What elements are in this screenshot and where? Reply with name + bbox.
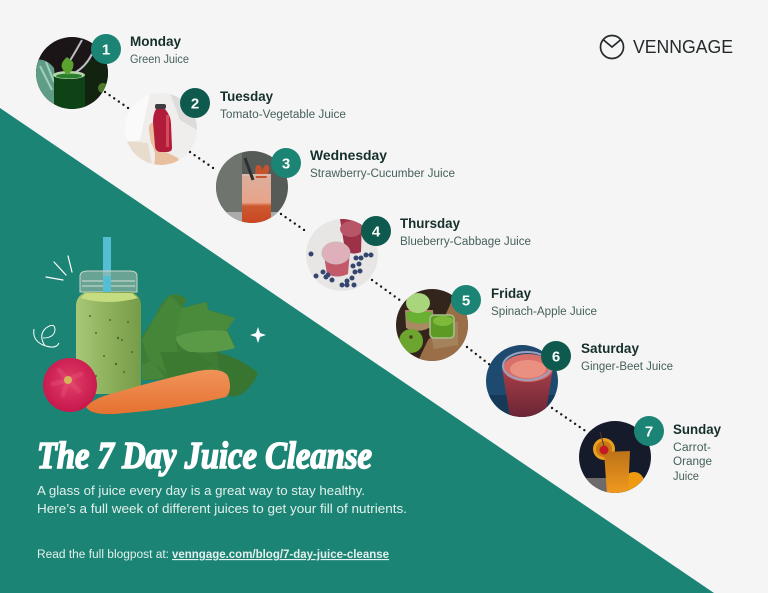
logo: Venngage — [600, 36, 733, 58]
label: Friday — [491, 285, 597, 318]
dotted connectors between days — [105, 92, 587, 432]
step: Saturday — [486, 340, 673, 418]
description: Here’s a full week of different juices to get your fill of nutrients. — [37, 501, 407, 516]
badge: 4 — [361, 216, 391, 246]
badge: 7 — [634, 416, 664, 446]
step: Sunday — [579, 416, 721, 494]
icon: sparkle — [250, 327, 266, 343]
label: Wednesday: Strawberry-Cucumber Juice — [310, 168, 455, 180]
label: Monday: Monday — [130, 33, 181, 49]
photo: tomato-vegetable juice — [125, 93, 197, 165]
label: Tuesday: Tomato-Vegetable Juice — [220, 109, 346, 121]
label: Sunday — [673, 421, 721, 483]
badge: 2 — [180, 88, 210, 118]
label: Tuesday — [220, 88, 346, 121]
icon: spinach leaves — [142, 295, 258, 397]
badge: 6 — [541, 341, 571, 371]
source link: Read the full blogpost at: — [37, 549, 169, 561]
badge: 1: 1 — [102, 42, 110, 58]
label: Sunday: Juice — [673, 471, 699, 483]
photo: spinach-apple juice — [396, 289, 468, 361]
step: Wednesday — [216, 147, 455, 225]
label: Saturday — [581, 340, 673, 373]
icon: burst lines — [46, 256, 72, 280]
photo: carrot-orange juice — [579, 421, 651, 494]
label: Tuesday: Tuesday — [220, 88, 273, 104]
icon: green smoothie jar — [76, 271, 141, 394]
description: A glass of juice every day is a great way to stay healthy. — [37, 483, 365, 498]
description — [37, 483, 407, 516]
logo: Venngage: VENNGAGE — [633, 36, 733, 57]
source link — [37, 549, 389, 561]
photo: green juice — [36, 37, 108, 110]
step: Tuesday — [125, 88, 346, 165]
step: Thursday — [306, 215, 531, 291]
label: Wednesday: Wednesday — [310, 147, 387, 163]
badge: 4: 4 — [372, 224, 381, 240]
label: Sunday: Carrot- — [673, 442, 711, 454]
icon: tomato — [43, 358, 97, 412]
badge: 6: 6 — [552, 348, 560, 366]
step: Friday — [396, 285, 597, 361]
title: The 7 Day Juice Cleanse — [37, 435, 372, 477]
badge: 5: 5 — [462, 292, 470, 310]
photo: ginger-beet juice — [486, 345, 558, 418]
label: Monday — [130, 33, 189, 66]
source link: venngage.com/blog/7-day-juice-cleanse — [172, 549, 389, 561]
badge: 7: 7 — [645, 424, 653, 440]
label: Wednesday — [310, 147, 455, 180]
label: Thursday: Blueberry-Cabbage Juice — [400, 236, 531, 248]
label: Saturday: Ginger-Beet Juice — [581, 361, 673, 373]
icon: straw — [103, 237, 111, 295]
badge: 2: 2 — [191, 96, 199, 112]
icon: swirl — [34, 325, 59, 347]
badge: 3 — [271, 148, 301, 178]
icon: carrot — [86, 370, 230, 414]
label: Thursday: Thursday — [400, 215, 460, 231]
label: Saturday: Saturday — [581, 340, 639, 356]
label: Sunday: Orange — [673, 456, 712, 468]
label: Sunday: Sunday — [673, 421, 721, 437]
label: Friday: Spinach-Apple Juice — [491, 306, 597, 318]
badge: 3: 3 — [282, 156, 290, 172]
label: Thursday — [400, 215, 531, 248]
panel: teal diagonal background — [0, 108, 714, 593]
label: Monday: Green Juice — [130, 54, 189, 66]
photo: blueberry-cabbage juice — [306, 219, 378, 291]
photo: strawberry-cucumber juice — [216, 151, 288, 225]
label: Friday: Friday — [491, 285, 531, 301]
badge: 1 — [91, 34, 121, 64]
step: Monday — [36, 33, 189, 110]
badge: 5 — [451, 285, 481, 315]
